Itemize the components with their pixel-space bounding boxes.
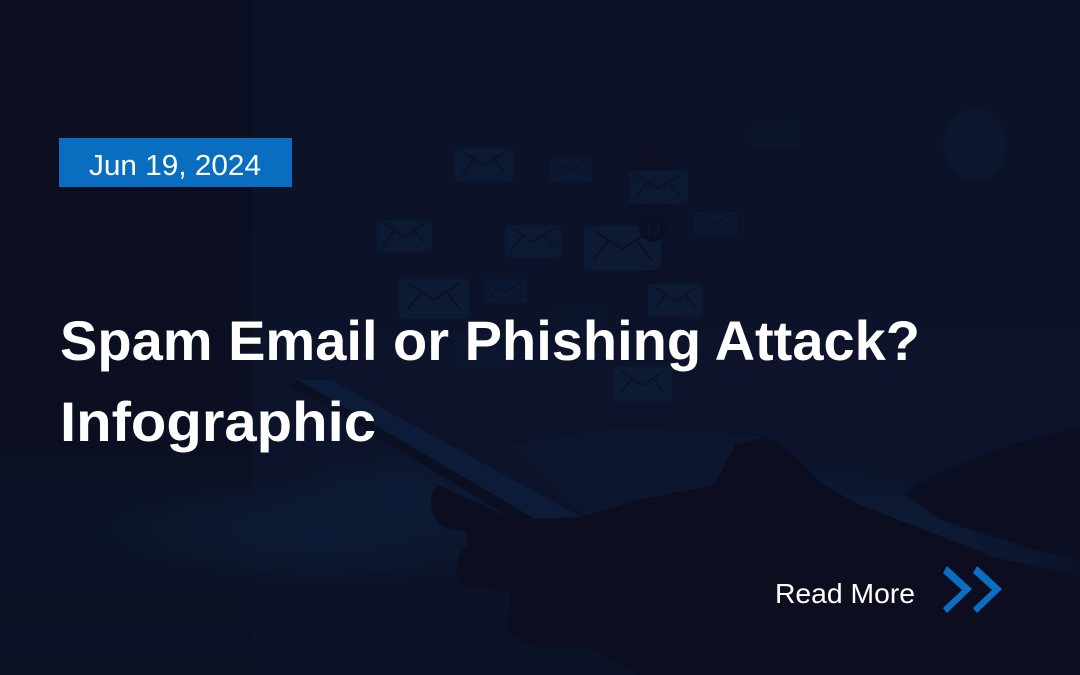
title: Spam Email or Phishing Attack? — [60, 309, 920, 372]
dark forearm, upper right — [902, 427, 1080, 560]
icon: envelope 13 — [613, 367, 672, 402]
icon: large envelope with badge: 12 — [646, 222, 660, 238]
icon: envelope 9 — [484, 279, 527, 303]
read more link — [775, 566, 1002, 613]
title — [60, 309, 920, 453]
date badge — [59, 138, 292, 187]
icon: envelope 8 — [399, 279, 469, 319]
icon: envelope 2 — [550, 158, 592, 182]
icon: envelope 10 — [648, 284, 703, 316]
envelope icons cluster — [377, 148, 737, 402]
icon: envelope 5 — [377, 220, 432, 252]
icon: envelope 6 — [505, 225, 561, 257]
icon: envelope 11 — [557, 307, 605, 334]
icon: envelope 4 — [694, 212, 737, 236]
icon: large envelope with badge — [584, 214, 667, 270]
icon: double chevron arrow — [943, 566, 1002, 613]
icon: envelope 12 — [455, 333, 513, 367]
icon: envelope 3 — [629, 171, 688, 204]
icon: envelope 1 — [455, 148, 513, 182]
title: Infographic — [60, 390, 376, 453]
date badge: Jun 19, 2024 — [89, 150, 261, 182]
read more link: Read More — [775, 578, 915, 609]
hand silhouette — [431, 437, 1080, 675]
phone and lit hand — [290, 380, 1080, 611]
